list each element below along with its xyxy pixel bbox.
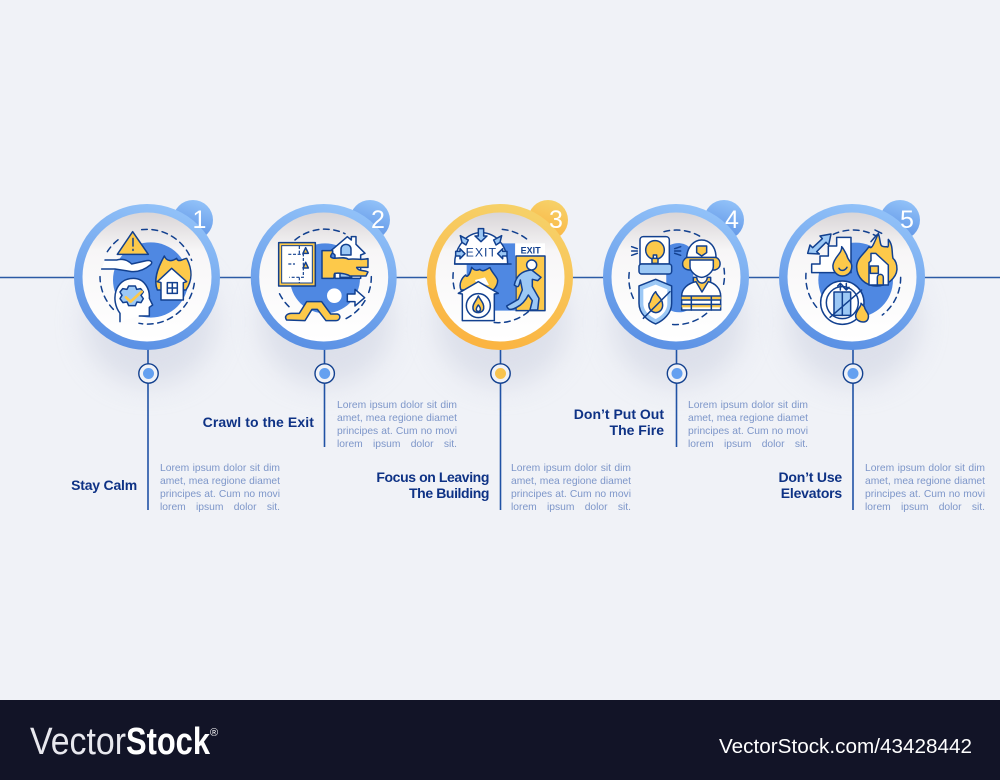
text: step 3 body: Lorem ipsum dolor sit dim [511, 462, 631, 474]
text: step 2 body: lorem ipsum dolor sit. [337, 439, 457, 450]
text: step 2 body: amet, mea regione diamet [337, 413, 457, 424]
text: step 1 body: Lorem ipsum dolor sit dim [160, 462, 280, 474]
text: step 1 body: lorem ipsum dolor sit. [160, 502, 280, 513]
heading: Focus on Leaving The Building [376, 469, 489, 501]
step 5 marker: 5 [900, 206, 914, 234]
heading: Crawl to the Exit: Crawl to the Exit [203, 414, 314, 430]
text: step 4 body: amet, mea regione diamet [688, 413, 808, 424]
icon: hand, warning, burning house, calm head [100, 229, 194, 324]
text: step 5 body: amet, mea regione diamet [865, 476, 985, 487]
heading: Don't Put Out The Fire [574, 406, 664, 438]
text: step 3 body: lorem ipsum dolor sit. [511, 502, 631, 513]
icon: floor plan, smoke house, crawling person [279, 229, 371, 321]
text: step 2 body: Lorem ipsum dolor sit dim [337, 400, 457, 410]
icon: alarm light, no fire shield, firefighter [629, 230, 724, 325]
heading: Don't Use Elevators: Don’t Use [778, 469, 842, 485]
text: step 1 body: principes at. Cum no movi [160, 489, 280, 500]
step 1 marker [74, 200, 220, 510]
text: step 5 body: Lorem ipsum dolor sit dim [865, 462, 985, 474]
icon: exit dome, burning house, person running to exit door [453, 229, 545, 323]
heading: Don't Put Out The Fire: The Fire [610, 422, 664, 438]
heading: Focus on Leaving The Building: The Building [409, 485, 489, 501]
text: step 3 body [511, 462, 631, 513]
text: step 4 body: lorem ipsum dolor sit. [688, 439, 808, 450]
text: step 4 body [688, 400, 808, 450]
step 2 marker [251, 200, 397, 447]
text: step 5 body: lorem ipsum dolor sit. [865, 502, 985, 513]
heading: Don't Use Elevators: Elevators [781, 485, 842, 501]
logo: Vector [30, 721, 126, 763]
text: step 4 body: principes at. Cum no movi [688, 426, 808, 437]
step 5 marker [779, 200, 925, 510]
step 3 marker (highlighted): 3 [549, 206, 563, 234]
step 4 marker: 4 [725, 206, 739, 234]
text: step 2 body [337, 400, 457, 450]
text: step 4 body: Lorem ipsum dolor sit dim [688, 400, 808, 410]
text: step 3 body: amet, mea regione diamet [511, 476, 631, 487]
timeline axis [0, 276, 1000, 278]
logo [30, 721, 218, 763]
icon: exit dome, burning house, person running to exit door: EXIT [521, 245, 541, 255]
text: step 1 body [160, 462, 280, 513]
footer bar [0, 700, 1000, 780]
step 3 marker (highlighted) [427, 200, 573, 510]
step 1 marker: 1 [193, 206, 206, 234]
logo: ® [210, 727, 218, 739]
text: step 2 body: principes at. Cum no movi [337, 426, 457, 437]
step 2 marker: 2 [371, 206, 385, 234]
step 4 marker [603, 200, 749, 447]
text: step 5 body: principes at. Cum no movi [865, 489, 985, 500]
logo: Stock [126, 721, 211, 763]
icon: stairs, burning house, no elevator [806, 230, 901, 324]
heading: Don't Put Out The Fire: Don’t Put Out [574, 406, 664, 422]
image id: VectorStock.com/43428442 [719, 736, 972, 758]
heading: Don't Use Elevators [778, 469, 842, 501]
icon: exit dome, burning house, person running to exit door: EXIT [466, 246, 497, 260]
text: step 3 body: principes at. Cum no movi [511, 489, 631, 500]
heading: Focus on Leaving The Building: Focus on Leaving [376, 469, 489, 485]
heading: Stay Calm: Stay Calm [71, 477, 137, 493]
text: step 1 body: amet, mea regione diamet [160, 476, 280, 487]
text: step 5 body [865, 462, 985, 513]
